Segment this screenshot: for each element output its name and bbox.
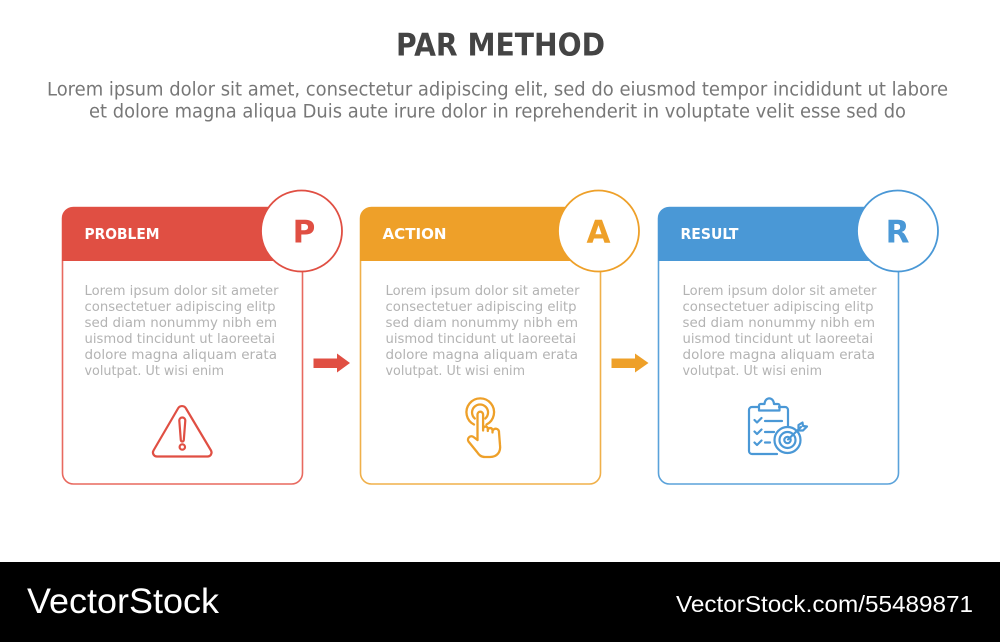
- title: PAR METHOD: [396, 28, 605, 64]
- footer brand: VectorStock: [27, 582, 220, 621]
- problem card outline: [62, 208, 302, 484]
- panel: result: [658, 190, 938, 484]
- result body text: consectetuer adipiscing elitp: [682, 300, 874, 315]
- problem body text: sed diam nonummy nibh em: [84, 316, 277, 331]
- problem body text: dolore magna aliquam erata: [84, 348, 277, 363]
- icon: clipboard with target: [749, 398, 807, 454]
- problem letter: P: [293, 214, 315, 250]
- problem body text: volutpat. Ut wisi enim: [84, 364, 224, 379]
- result body text: volutpat. Ut wisi enim: [682, 364, 822, 379]
- problem heading: PROBLEM: [84, 225, 160, 243]
- action header band: [360, 207, 588, 261]
- action letter circle: [558, 190, 639, 272]
- action body text: volutpat. Ut wisi enim: [386, 364, 525, 379]
- result card outline: [658, 208, 898, 484]
- footer bar: [0, 562, 1000, 642]
- subtitle text: Lorem ipsum dolor sit amet, consectetur adipiscing elit, sed do eiusmod tempor incididunt ut labore: [47, 80, 948, 100]
- action body text: Lorem ipsum dolor sit ameter: [386, 284, 580, 299]
- action heading: ACTION: [382, 225, 446, 243]
- arrow: action to result: [612, 354, 648, 372]
- result letter circle: [857, 190, 938, 272]
- problem letter circle: [261, 190, 342, 272]
- problem header band: [62, 207, 290, 261]
- result header band: [658, 207, 886, 261]
- result body text: uismod tincidunt ut laoreetai: [682, 332, 873, 347]
- problem body text: Lorem ipsum dolor sit ameter: [84, 284, 279, 299]
- icon: tapping hand: [466, 398, 500, 457]
- problem body text: uismod tincidunt ut laoreetai: [84, 332, 275, 347]
- panel: action: [360, 190, 639, 484]
- action card outline: [360, 208, 600, 484]
- panel: problem: [62, 190, 342, 484]
- result heading: RESULT: [680, 225, 739, 243]
- action body text: consectetuer adipiscing elitp: [386, 300, 576, 315]
- problem body text: consectetuer adipiscing elitp: [84, 300, 276, 315]
- action letter: A: [586, 214, 610, 250]
- action body text: [386, 284, 580, 379]
- subtitle text: [47, 80, 948, 122]
- action body text: uismod tincidunt ut laoreetai: [386, 332, 576, 347]
- result body text: sed diam nonummy nibh em: [682, 316, 875, 331]
- icon: warning triangle: [153, 406, 212, 457]
- action body text: dolore magna aliquam erata: [386, 348, 578, 363]
- action body text: sed diam nonummy nibh em: [386, 316, 578, 331]
- result body text: dolore magna aliquam erata: [682, 348, 875, 363]
- result letter: R: [886, 214, 910, 250]
- arrow: problem to action: [314, 354, 350, 372]
- subtitle text: et dolore magna aliqua Duis aute irure dolor in reprehenderit in voluptate velit esse sed do: [89, 102, 906, 122]
- result body text: Lorem ipsum dolor sit ameter: [682, 284, 877, 299]
- problem body text: [84, 284, 279, 379]
- result body text: [682, 284, 877, 379]
- footer url: VectorStock.com/55489871: [676, 591, 973, 617]
